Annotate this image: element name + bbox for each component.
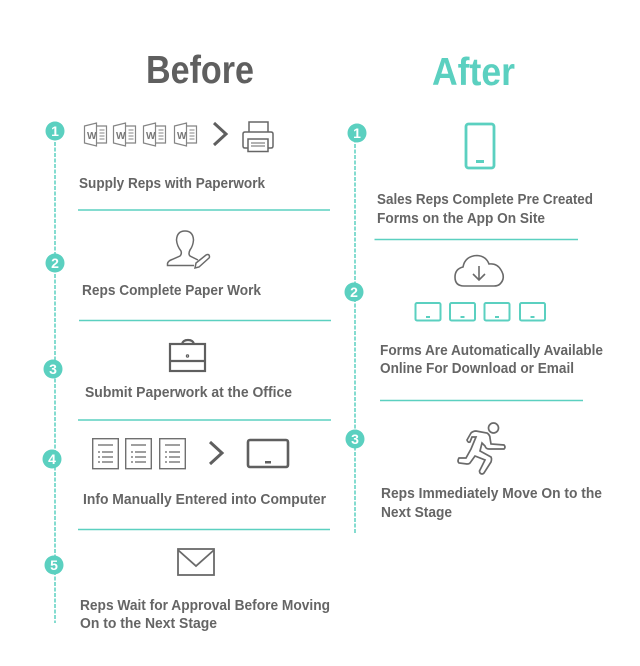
step 2 marker: [46, 254, 64, 272]
text: after step 3: Next Stage: [381, 505, 452, 521]
text: step 3: Submit Paperwork at the Office: [85, 385, 292, 401]
text: step 5: Reps Wait for Approval Before Moving: [80, 598, 330, 614]
text: step 4: Info Manually Entered into Computer: [83, 492, 326, 508]
text: step 2: Reps Complete Paper Work: [82, 283, 262, 299]
divider: [78, 209, 330, 211]
text: after step 2: Online For Download or Email: [380, 361, 574, 377]
icon: cloud download: [455, 256, 503, 286]
text: after step 2: Forms Are Automatically Available: [380, 343, 603, 359]
step 4 marker: 4: [48, 451, 56, 467]
step 1 marker: [46, 122, 64, 140]
text: after step 1: Sales Reps Complete Pre Created: [377, 192, 593, 208]
icon: documents: [93, 439, 185, 469]
step 4 marker: [42, 450, 62, 468]
icon: word documents: W: [146, 131, 156, 142]
icon: word documents: W: [87, 131, 97, 142]
timeline: after: [344, 124, 366, 534]
icon: word documents: W: [177, 131, 187, 142]
icon: chevron arrow: [214, 123, 226, 145]
text: after step 1: Forms on the App On Site: [377, 211, 545, 227]
icon: person with pencil: [168, 231, 210, 268]
icon: word documents: W: [116, 131, 126, 142]
after step 1 marker: [348, 124, 366, 142]
step 5 marker: [44, 556, 64, 574]
step 1 marker: 1: [51, 123, 59, 139]
divider: [78, 528, 330, 530]
after step 3 marker: 3: [351, 431, 359, 447]
text: step 5: On to the Next Stage: [80, 616, 217, 632]
text: step 1: Supply Reps with Paperwork: [79, 176, 266, 192]
icon: phone: [466, 124, 494, 168]
icon: printer: [243, 122, 273, 152]
step 3 marker: 3: [49, 361, 57, 377]
step 3 marker: [44, 360, 62, 378]
icon: tablets: [416, 303, 545, 320]
icon: briefcase: [170, 340, 205, 371]
title: After: After: [432, 51, 515, 94]
icon: envelope: [178, 549, 214, 575]
divider: [78, 419, 331, 421]
icon: computer screen: [248, 440, 288, 467]
divider: [374, 238, 578, 240]
icon: runner: [458, 423, 505, 474]
after step 1 marker: 1: [353, 125, 361, 141]
after step 2 marker: [344, 282, 364, 302]
after step 3 marker: [346, 430, 364, 448]
step 5 marker: 5: [50, 557, 58, 573]
divider: [380, 400, 583, 402]
title: Before: Before: [146, 49, 254, 92]
icon: word documents: [84, 123, 196, 146]
after step 2 marker: 2: [350, 284, 358, 300]
timeline: before: [42, 122, 64, 623]
text: after step 3: Reps Immediately Move On to the: [381, 486, 602, 502]
icon: chevron arrow: [210, 442, 222, 464]
divider: [79, 320, 331, 322]
step 2 marker: 2: [51, 255, 59, 271]
